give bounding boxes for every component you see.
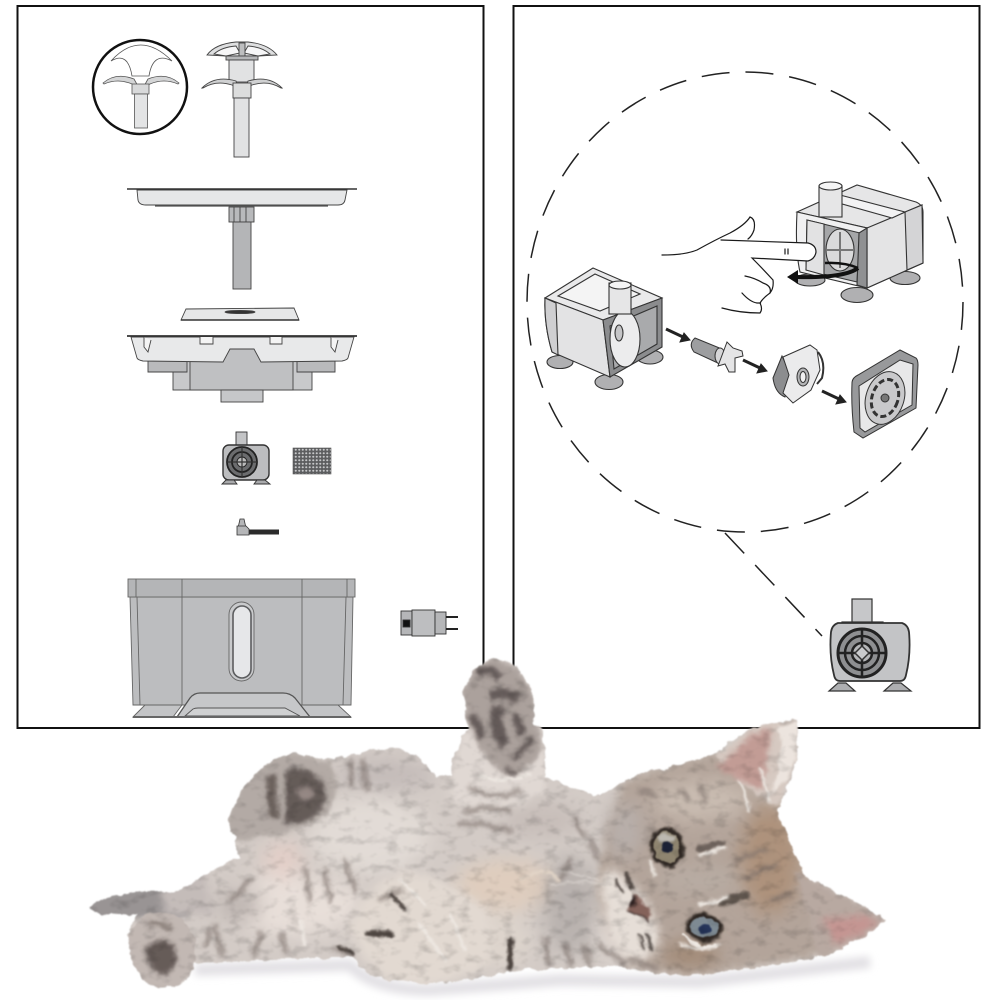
floor shadow — [195, 962, 870, 990]
raised paw pads — [472, 671, 532, 772]
panel: pump cleaning steps — [514, 6, 980, 728]
part: flat plate — [181, 308, 299, 320]
soft light and dark body washes — [218, 759, 598, 968]
panel: fountain exploded view — [18, 6, 484, 728]
front paw — [352, 872, 480, 984]
fur stripes dark — [205, 760, 790, 968]
upper hind paw — [225, 754, 336, 842]
head base — [597, 753, 833, 975]
pump front grill cover — [852, 350, 918, 438]
lower hind foot — [126, 913, 196, 989]
part: housing lid — [127, 336, 357, 402]
lower eye — [682, 910, 725, 946]
bold dark markings — [340, 843, 745, 968]
kitten photo illustration — [80, 650, 900, 995]
tail — [85, 888, 190, 918]
upper ear — [716, 720, 798, 805]
kitten base fur — [80, 650, 900, 995]
pump right with finger target — [795, 182, 923, 302]
lower ear — [795, 870, 885, 958]
icon: hand pushing impeller — [662, 217, 816, 313]
part: cable connector — [237, 519, 279, 535]
part: reservoir base — [128, 579, 355, 717]
upper eye — [646, 824, 688, 870]
raised foreleg fur — [454, 732, 545, 796]
upper hind paw pads — [271, 769, 326, 824]
part: water tray with tube — [127, 189, 357, 289]
light fur highlights — [300, 770, 770, 960]
part: pump cap detail in circle — [93, 40, 187, 134]
raised paw base — [463, 658, 542, 775]
part: power adapter — [401, 610, 458, 636]
dashed magnifier circle with tail — [527, 72, 963, 636]
impeller — [691, 338, 743, 372]
pale muzzle and cheek — [600, 869, 660, 962]
arrow: turn direction — [787, 263, 858, 284]
pump front view — [829, 599, 911, 691]
part: pump — [222, 432, 270, 484]
nose — [628, 892, 650, 921]
arrows: disassembly order — [666, 329, 846, 404]
head colour washes — [603, 780, 800, 967]
lower foot pads — [145, 923, 176, 976]
part: fountain spout with cap — [202, 42, 282, 157]
tail base blend — [158, 876, 211, 917]
part: sponge filter — [293, 448, 331, 474]
pump left with open front — [545, 268, 663, 390]
impeller cover disc — [773, 345, 823, 403]
